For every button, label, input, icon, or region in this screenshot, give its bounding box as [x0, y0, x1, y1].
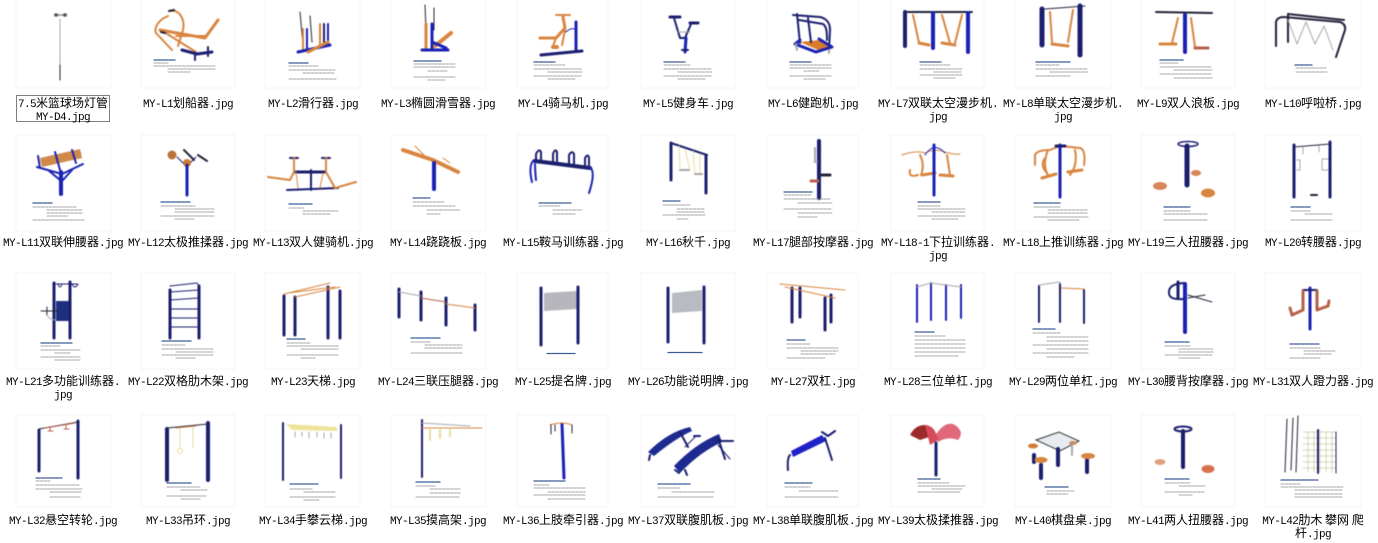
- icon: glider: [298, 12, 330, 52]
- item: MY-L30 腰背按摩器: [1128, 273, 1248, 389]
- caption: MY-L7双联太空漫步机.: [878, 94, 998, 111]
- item: MY-L26 功能说明牌: [628, 273, 748, 389]
- caption: MY-L17腿部按摩器.jpg: [753, 233, 873, 250]
- item: MY-L39 太极揉推器: [878, 415, 998, 528]
- item: MY-L9 双人浪板: [1137, 0, 1239, 111]
- item: MY-L23 天梯: [265, 273, 360, 389]
- caption: MY-L37双联腹肌板.jpg: [628, 511, 748, 528]
- icon: elliptical skier: [422, 5, 451, 50]
- icon: name board: [541, 287, 578, 345]
- spec text: [411, 342, 462, 353]
- caption: MY-L30腰背按摩器.jpg: [1128, 372, 1248, 389]
- focus outline and caption: 7.5米篮球场灯管: [18, 94, 108, 111]
- spec text: [162, 345, 213, 358]
- spec text: [41, 346, 80, 360]
- item: MY-L11 双联伸腰器: [3, 135, 123, 250]
- caption: MY-L42肋木 攀网 爬: [1262, 511, 1364, 528]
- item: MY-L35 摸高架: [390, 415, 486, 528]
- caption: MY-L8单联太空漫步机.: [1003, 94, 1123, 111]
- spec text: [663, 205, 705, 219]
- icon: swing: [671, 143, 707, 193]
- item: MY-L38 单联腹肌板: [753, 415, 873, 528]
- icon: function board: [668, 287, 704, 343]
- icon: suspended wheel: [39, 421, 78, 478]
- item: 7.5米篮球场灯管 MY-D4: [16, 0, 111, 124]
- caption: jpg: [54, 390, 72, 402]
- icon: hand ladder: [283, 423, 341, 480]
- item: MY-L16 秋千: [641, 135, 735, 250]
- caption: MY-L26功能说明牌.jpg: [628, 372, 748, 389]
- item: MY-L1 划船器: [141, 0, 235, 111]
- spec text: [287, 343, 338, 358]
- icon: climbing net and poles: [1285, 416, 1336, 473]
- caption: MY-L4骑马机.jpg: [518, 94, 608, 111]
- caption: jpg: [929, 112, 947, 124]
- caption: jpg: [1054, 112, 1072, 124]
- item: MY-L41 两人扭腰器: [1128, 415, 1248, 528]
- spec text: [658, 488, 714, 497]
- item: MY-L5 健身车: [641, 0, 735, 111]
- icon: back massager: [1169, 282, 1212, 332]
- caption: MY-L39太极揉推器.jpg: [878, 511, 998, 528]
- caption: MY-L3椭圆滑雪器.jpg: [381, 94, 495, 111]
- spec text: [290, 489, 335, 500]
- icon: treadmill: [793, 14, 833, 53]
- caption: MY-L29两位单杠.jpg: [1009, 372, 1117, 389]
- item: MY-L6 健跑机: [767, 0, 858, 111]
- item: MY-L13 双人健骑机: [253, 135, 373, 250]
- item: MY-L42 肋木 攀网 爬杆: [1262, 415, 1364, 541]
- icon: triple waist twister: [1153, 142, 1215, 198]
- item: MY-L27 双杠: [767, 273, 858, 389]
- caption: jpg: [929, 251, 947, 263]
- caption: MY-L20转腰器.jpg: [1265, 233, 1361, 250]
- caption: MY-L18-1下拉训练器.: [881, 233, 995, 250]
- item: MY-L36 上肢牵引器: [503, 415, 623, 528]
- icon: tai chi pusher: [168, 150, 207, 195]
- icon: exercise bike: [670, 17, 698, 52]
- item: MY-L31 双人蹬力器: [1253, 273, 1373, 389]
- item: MY-L3 椭圆滑雪器: [381, 0, 495, 111]
- item: MY-L15 鞍马训练器: [503, 135, 623, 250]
- icon: parallel bars: [780, 284, 845, 330]
- icon: push-up trainer: [1035, 145, 1084, 197]
- icon: leg massager: [811, 141, 830, 198]
- caption: MY-L10呼啦桥.jpg: [1265, 94, 1361, 111]
- icon: horse rider: [540, 15, 582, 55]
- spec text: [289, 66, 337, 79]
- icon: wall bars: [170, 283, 199, 338]
- icon: single air walker: [1042, 6, 1085, 55]
- caption: MY-L38单联腹肌板.jpg: [753, 511, 873, 528]
- caption: MY-L28三位单杠.jpg: [884, 372, 992, 389]
- item: MY-L22 双格肋木架: [128, 273, 248, 389]
- item: MY-L21 多功能训练器: [6, 273, 120, 402]
- spec text: [534, 65, 582, 79]
- caption: MY-L16秋千.jpg: [646, 233, 730, 250]
- item: MY-L18-1 下拉训练器: [881, 135, 995, 263]
- caption: MY-L14跷跷板.jpg: [390, 233, 486, 250]
- icon: double rider: [268, 158, 356, 190]
- board title text: [668, 352, 703, 354]
- spec text: [1165, 483, 1205, 495]
- board title text: [547, 352, 575, 354]
- caption: MY-L11双联伸腰器.jpg: [3, 233, 123, 250]
- spec text: [918, 483, 965, 492]
- spec text: [787, 344, 838, 358]
- item: MY-L24 三联压腿器: [378, 273, 498, 389]
- caption: MY-L34手攀云梯.jpg: [259, 511, 367, 528]
- spec text: [154, 63, 215, 72]
- icon: tai chi wheels: [910, 424, 961, 475]
- caption: MY-L6健跑机.jpg: [768, 94, 858, 111]
- caption: MY-L41两人扭腰器.jpg: [1128, 511, 1248, 528]
- caption: MY-L1划船器.jpg: [143, 94, 233, 111]
- caption: MY-L22双格肋木架.jpg: [128, 372, 248, 389]
- caption: MY-L36上肢牵引器.jpg: [503, 511, 623, 528]
- item: MY-L33 吊环: [141, 415, 235, 528]
- caption: [881, 233, 995, 263]
- caption: MY-L25提名牌.jpg: [515, 372, 611, 389]
- focus outline and caption: MY-D4.jpg: [36, 112, 90, 124]
- item: MY-L2 滑行器: [265, 0, 360, 111]
- icon: waist turner: [1294, 142, 1330, 197]
- item: MY-L20 转腰器: [1265, 135, 1361, 250]
- caption: MY-L18上推训练器.jpg: [1003, 233, 1123, 250]
- caption: MY-L2滑行器.jpg: [268, 94, 358, 111]
- spec text: [539, 206, 582, 214]
- spec text: [36, 481, 82, 497]
- spec text: [915, 336, 965, 356]
- item: MY-L17 腿部按摩器: [753, 135, 873, 250]
- caption: [878, 94, 998, 124]
- caption: 杆.jpg: [1295, 524, 1331, 541]
- spec text: [1296, 68, 1328, 72]
- caption: MY-L12太极推揉器.jpg: [128, 233, 248, 250]
- spec text: [664, 65, 712, 79]
- icon: double leg press: [1290, 288, 1329, 329]
- spec text: [1281, 484, 1343, 497]
- spec text: [1034, 207, 1088, 220]
- icon: single sit-up board: [788, 431, 835, 470]
- spec text: [1290, 348, 1335, 358]
- spec text: [785, 487, 838, 497]
- spec text: [920, 65, 962, 78]
- icon: double waist twister: [1154, 426, 1214, 473]
- spec text: [1165, 346, 1213, 358]
- item: MY-L32 悬空转轮: [9, 415, 117, 528]
- spec text: [416, 486, 460, 497]
- caption: MY-L13双人健骑机.jpg: [253, 233, 373, 250]
- icon: double sit-up boards: [648, 427, 733, 475]
- spec text: [1033, 333, 1088, 357]
- caption: MY-L19三人扭腰器.jpg: [1128, 233, 1248, 250]
- icon: seesaw: [403, 146, 458, 189]
- item: MY-L7 双联太空漫步机: [878, 0, 998, 124]
- icon: triple pull-up bar: [917, 283, 961, 322]
- spec text: [1036, 65, 1088, 76]
- caption: [6, 372, 120, 402]
- item: MY-L25 提名牌: [515, 273, 611, 389]
- caption: MY-L32悬空转轮.jpg: [9, 511, 117, 528]
- spec text: [413, 202, 460, 214]
- spec text: [1047, 491, 1075, 494]
- caption: MY-L9双人浪板.jpg: [1137, 94, 1239, 111]
- spec text: [161, 206, 214, 219]
- icon: hula bridge: [1276, 14, 1345, 57]
- item: MY-L40 棋盘桌: [1015, 415, 1111, 528]
- spec text: [784, 195, 832, 217]
- spec text: [534, 485, 585, 499]
- caption: [1003, 94, 1123, 124]
- icon: upper limb puller: [550, 423, 572, 478]
- icon: reach frame: [422, 420, 482, 477]
- icon: rings: [167, 423, 208, 480]
- icon: double air walker: [905, 12, 972, 52]
- caption: MY-L40棋盘桌.jpg: [1015, 511, 1111, 528]
- item: MY-L8 单联太空漫步机: [1003, 0, 1123, 124]
- caption: MY-L23天梯.jpg: [271, 372, 355, 389]
- caption: MY-L24三联压腿器.jpg: [378, 372, 498, 389]
- item: MY-L12 太极推揉器: [128, 135, 248, 250]
- icon: double pull-up bar: [1039, 282, 1084, 323]
- spec text: [790, 65, 831, 79]
- item: MY-L28 三位单杠: [884, 273, 992, 389]
- item: MY-L19 三人扭腰器: [1128, 135, 1248, 250]
- icon: double surf board: [1156, 12, 1212, 52]
- icon: triple leg press: [399, 289, 475, 330]
- icon: basketball court lamp: [54, 13, 67, 80]
- spec text: [33, 207, 85, 220]
- item: MY-L18 上推训练器: [1003, 135, 1123, 250]
- icon: pommel horse: [530, 150, 593, 193]
- caption: MY-L5健身车.jpg: [643, 94, 733, 111]
- caption: [1262, 511, 1364, 541]
- caption: MY-L27双杠.jpg: [771, 372, 855, 389]
- spec text: [918, 206, 965, 219]
- item: MY-L14 跷跷板: [390, 135, 486, 250]
- spec text: [167, 487, 207, 499]
- icon: pull-down trainer: [902, 145, 960, 195]
- item: MY-L4 骑马机: [517, 0, 608, 111]
- item: MY-L37 双联腹肌板: [628, 415, 748, 528]
- icon: chess table: [1028, 432, 1095, 478]
- icon: rowing machine: [156, 10, 218, 60]
- caption: MY-L21多功能训练器.: [6, 372, 120, 389]
- spec text: [289, 208, 338, 214]
- spec text: [1291, 211, 1332, 220]
- spec text: [1160, 63, 1212, 78]
- caption: MY-L15鞍马训练器.jpg: [503, 233, 623, 250]
- caption: MY-L31双人蹬力器.jpg: [1253, 372, 1373, 389]
- item: MY-L34 手攀云梯: [259, 415, 367, 528]
- spec text: [1164, 211, 1208, 220]
- item: MY-L29 两位单杠: [1009, 273, 1117, 389]
- caption: MY-L33吊环.jpg: [146, 511, 230, 528]
- focus outline and caption: [16, 94, 110, 124]
- caption: MY-L35摸高架.jpg: [390, 511, 486, 528]
- icon: double waist stretcher: [37, 149, 83, 194]
- spec text: [414, 64, 455, 80]
- icon: multi-function trainer: [41, 282, 78, 338]
- icon: overhead ladder: [284, 283, 340, 338]
- item: MY-L10 呼啦桥: [1265, 0, 1361, 111]
